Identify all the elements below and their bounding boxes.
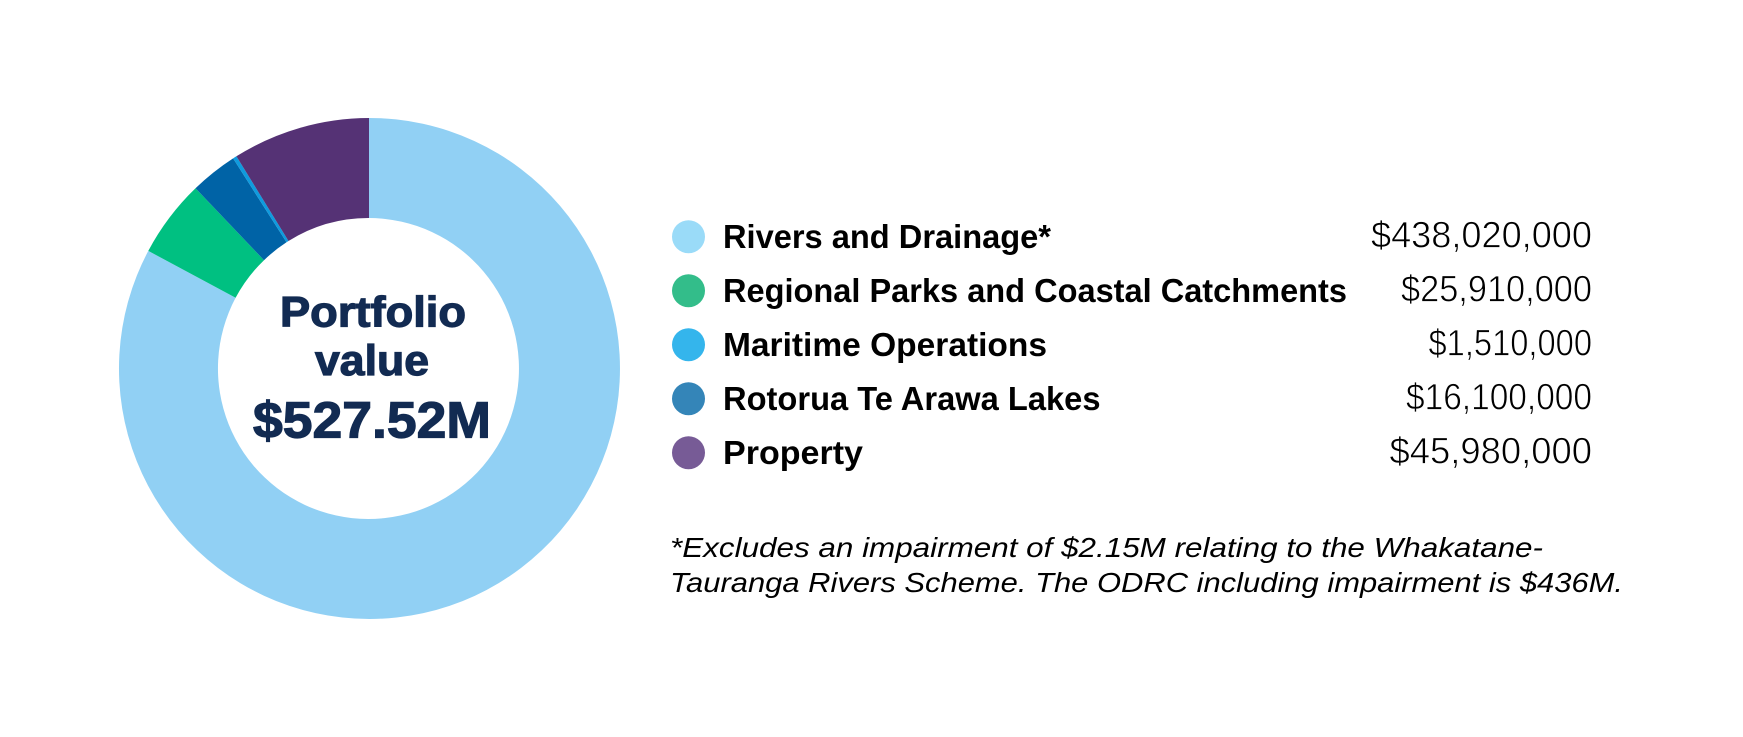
centre label figure: $527.52M: $527.52M	[253, 392, 491, 448]
legend	[672, 214, 1592, 472]
centre label: portfolio value	[253, 288, 491, 448]
legend row: Property: $45,980,000	[1390, 430, 1592, 472]
legend row: Property: Property	[723, 434, 864, 471]
segment: Rotorua Te Arawa Lakes	[196, 158, 286, 260]
legend row: Maritime Operations	[672, 322, 1592, 364]
segment: Regional Parks and Coastal Catchments	[148, 188, 264, 298]
centre label line: Portfolio: Portfolio	[280, 288, 466, 336]
segment: Property	[236, 118, 369, 241]
segment: Maritime Operations	[233, 156, 288, 242]
legend row: Rivers and Drainage: $438,020,000	[1371, 214, 1592, 256]
footnote: Tauranga Rivers Scheme. The ODRC including impairment is $436M.	[670, 567, 1623, 598]
footnote: *Excludes an impairment of $2.15M relating to the Whakatane-	[670, 532, 1543, 563]
centre label line: value: value	[315, 337, 429, 385]
legend row: Maritime Operations: $1,510,000	[1428, 322, 1592, 364]
legend row: Rotorua Te Arawa Lakes: $16,100,000	[1406, 376, 1592, 418]
legend row: Rotorua Te Arawa Lakes: Rotorua Te Arawa Lakes	[723, 380, 1100, 417]
legend row: Rivers and Drainage: Rivers and Drainage*	[723, 218, 1051, 255]
legend row: Property	[672, 430, 1592, 472]
legend row: Maritime Operations: Maritime Operations	[723, 326, 1047, 363]
segment: Rivers and Drainage	[119, 118, 620, 619]
donut chart: portfolio value	[119, 118, 620, 619]
footnote	[670, 532, 1623, 598]
legend row: Rotorua Te Arawa Lakes	[672, 376, 1592, 418]
legend row: Regional Parks and Coastal Catchments: $25,910,000	[1401, 268, 1592, 310]
legend row: Regional Parks and Coastal Catchments: Regional Parks and Coastal Catchments	[723, 272, 1347, 309]
legend row: Rivers and Drainage	[672, 214, 1592, 256]
legend row: Regional Parks and Coastal Catchments	[672, 268, 1592, 310]
